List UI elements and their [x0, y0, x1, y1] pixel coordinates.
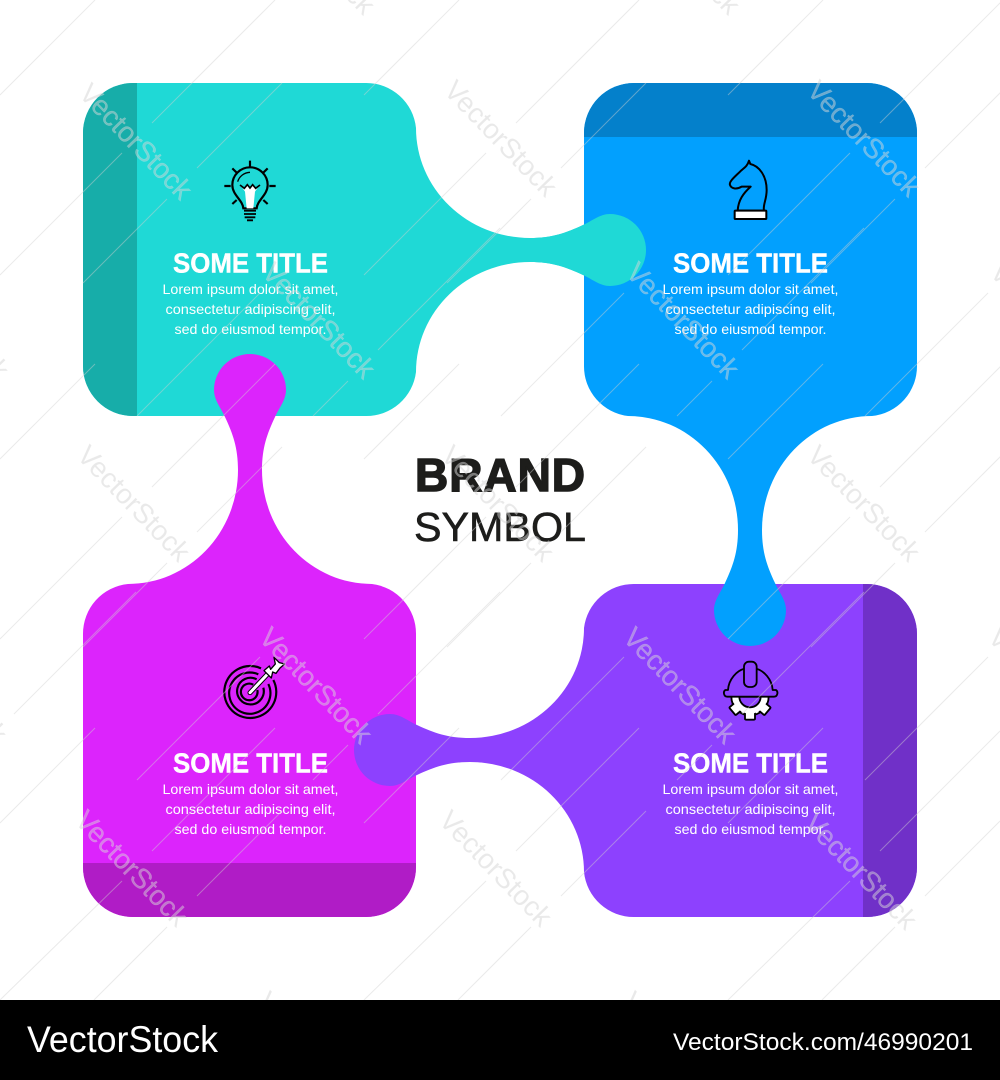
watermark: repeated VectorStock text: V [617, 986, 652, 1021]
watermark: repeated VectorStock text: VectorStock [253, 621, 379, 750]
text block: purple card: SOME TITLE [673, 748, 828, 778]
text block: magenta card: consectetur adipiscing elit, [166, 802, 336, 817]
watermark: repeated VectorStock text: VectorStock [256, 256, 382, 385]
watermark: repeated VectorStock text: VectorStock [73, 77, 199, 206]
text block: magenta card: SOME TITLE [173, 748, 328, 778]
icon: helmet and gear [724, 662, 777, 720]
teal connector bulb over blue card [530, 214, 646, 286]
text block: purple card: sed do eiusmod tempor. [674, 822, 826, 837]
text block: blue card: SOME TITLE [673, 248, 828, 278]
text block: blue card: consectetur adipiscing elit, [666, 302, 836, 317]
panel: purple card [354, 584, 917, 917]
text block: purple card [662, 748, 838, 837]
watermark: repeated VectorStock text: VectorStock [801, 439, 927, 568]
watermark: repeated VectorStock text: V [252, 986, 287, 1021]
center title: brand symbol [414, 449, 586, 550]
footer image id: VectorStock.com/46990201 [673, 1029, 973, 1056]
footer logo text: VectorStock [27, 1019, 218, 1060]
watermark: repeated VectorStock text: VectorStock [435, 439, 561, 568]
icon: target with dart [224, 657, 285, 718]
panel: blue card [584, 83, 917, 646]
text block: blue card: sed do eiusmod tempor. [674, 322, 826, 337]
panel: magenta card [83, 354, 416, 917]
watermark: repeated VectorStock text: VectorStock [620, 256, 746, 385]
watermark: repeated VectorStock text: VectorStock [801, 74, 927, 203]
watermark: repeated VectorStock text: VectorStock [798, 807, 924, 936]
icon: light bulb [224, 161, 276, 220]
watermark: repeated VectorStock text: VectorStock [69, 804, 195, 933]
text block: teal card: SOME TITLE [173, 248, 328, 278]
text block: purple card: Lorem ipsum dolor sit amet, [662, 782, 838, 797]
center title: brand symbol: BRAND [415, 449, 585, 501]
text block: teal card: sed do eiusmod tempor. [174, 322, 326, 337]
text block: teal card [162, 248, 338, 337]
panel: teal card [83, 83, 646, 416]
text block: blue card [662, 248, 838, 337]
center title: brand symbol: SYMBOL [414, 504, 586, 550]
watermark: repeated VectorStock text: VectorStock [433, 804, 559, 933]
icon: chess knight [730, 161, 767, 219]
text block: teal card: Lorem ipsum dolor sit amet, [162, 282, 338, 297]
watermark: repeated VectorStock text: VectorStock [617, 621, 743, 750]
watermark: repeated VectorStock text: VectorStock [438, 74, 564, 203]
text block: magenta card [162, 748, 338, 837]
text block: blue card: Lorem ipsum dolor sit amet, [662, 282, 838, 297]
text block: magenta card: Lorem ipsum dolor sit amet, [162, 782, 338, 797]
watermark: repeated VectorStock text: VectorStock [71, 439, 197, 568]
text block: magenta card: sed do eiusmod tempor. [174, 822, 326, 837]
text block: teal card: consectetur adipiscing elit, [166, 302, 336, 317]
footer bar [0, 1000, 1000, 1080]
text block: purple card: consectetur adipiscing elit, [666, 802, 836, 817]
